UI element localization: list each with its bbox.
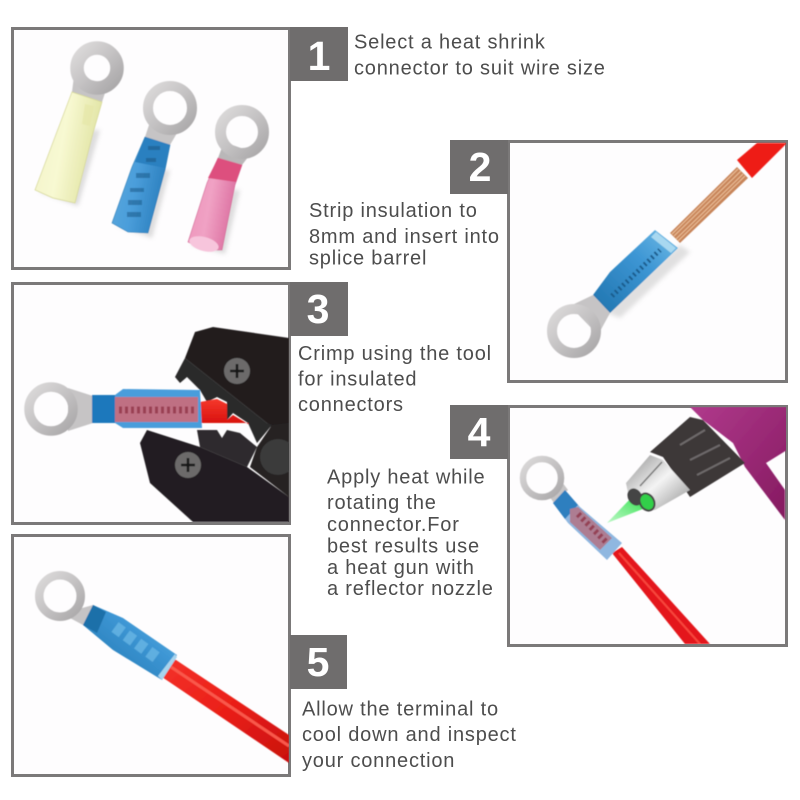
- panel 2: strip wire and insert into barrel: [508, 142, 787, 382]
- silver ring: [523, 459, 568, 503]
- crimper upper jaw: [175, 327, 296, 497]
- number badge 3: 3: [307, 286, 329, 332]
- step 2 text: 8mm and insert into: [309, 226, 500, 248]
- step 4 text: a heat gun with: [327, 557, 475, 579]
- silver ring: [29, 387, 93, 431]
- number badge 4: [450, 405, 508, 459]
- step 2 text: splice barrel: [309, 248, 427, 270]
- number badge 5: [290, 635, 347, 689]
- nozzle openings: [626, 488, 656, 512]
- step 5 text: cool down and inspect: [302, 724, 517, 746]
- blue barrel: [593, 230, 690, 318]
- step 1 text: connector to suit wire size: [354, 58, 606, 80]
- number badge 2: [450, 140, 508, 194]
- crimper lower jaw: [140, 430, 289, 522]
- step 1 text: Select a heat shrink: [354, 32, 546, 54]
- heat gun body: [690, 407, 787, 520]
- step 3 text: connectors: [298, 394, 404, 416]
- step 4 text: connector.For: [327, 514, 460, 536]
- panel 3: crimping tool: [12, 284, 296, 524]
- panel 5: finished connection: [12, 536, 290, 776]
- copper strands: [670, 167, 748, 243]
- yellow ring terminal: [35, 48, 117, 206]
- step 4 text: Apply heat while: [327, 466, 485, 488]
- red wire insulation: [737, 143, 787, 178]
- step 2 text: Strip insulation to: [309, 200, 478, 222]
- silver ring: [39, 575, 93, 625]
- panel 1: three ring connectors: [12, 28, 290, 268]
- silver ring: [552, 295, 610, 353]
- green heat beam: [607, 500, 643, 523]
- panel 4: heat gun: [508, 406, 787, 646]
- number badge 1: [290, 27, 348, 81]
- blue sleeve with red tint: [92, 389, 202, 428]
- step 4 text: rotating the: [327, 492, 437, 514]
- step 4 text: best results use: [327, 536, 480, 558]
- step 3 text: for insulated: [298, 368, 417, 390]
- number badge 3: [290, 282, 348, 336]
- red wire: [612, 547, 710, 644]
- red wire: [200, 399, 249, 424]
- heat gun collar: [650, 417, 745, 497]
- pink ring terminal: [188, 110, 264, 255]
- number badge 2: 2: [469, 144, 491, 190]
- sleeve: [553, 490, 622, 560]
- number badge 5: 5: [307, 639, 329, 685]
- number badge 4: 4: [468, 409, 491, 455]
- heat gun nozzle: [626, 455, 690, 511]
- blue shrunk sleeve: [83, 605, 177, 680]
- step 5 text: Allow the terminal to: [302, 698, 499, 720]
- step 4 text: a reflector nozzle: [327, 578, 494, 600]
- blue ring terminal: [112, 86, 192, 238]
- number badge 1: 1: [308, 33, 330, 79]
- step 5 text: your connection: [302, 750, 455, 772]
- step 3 text: Crimp using the tool: [298, 343, 492, 365]
- red wire: [162, 658, 289, 763]
